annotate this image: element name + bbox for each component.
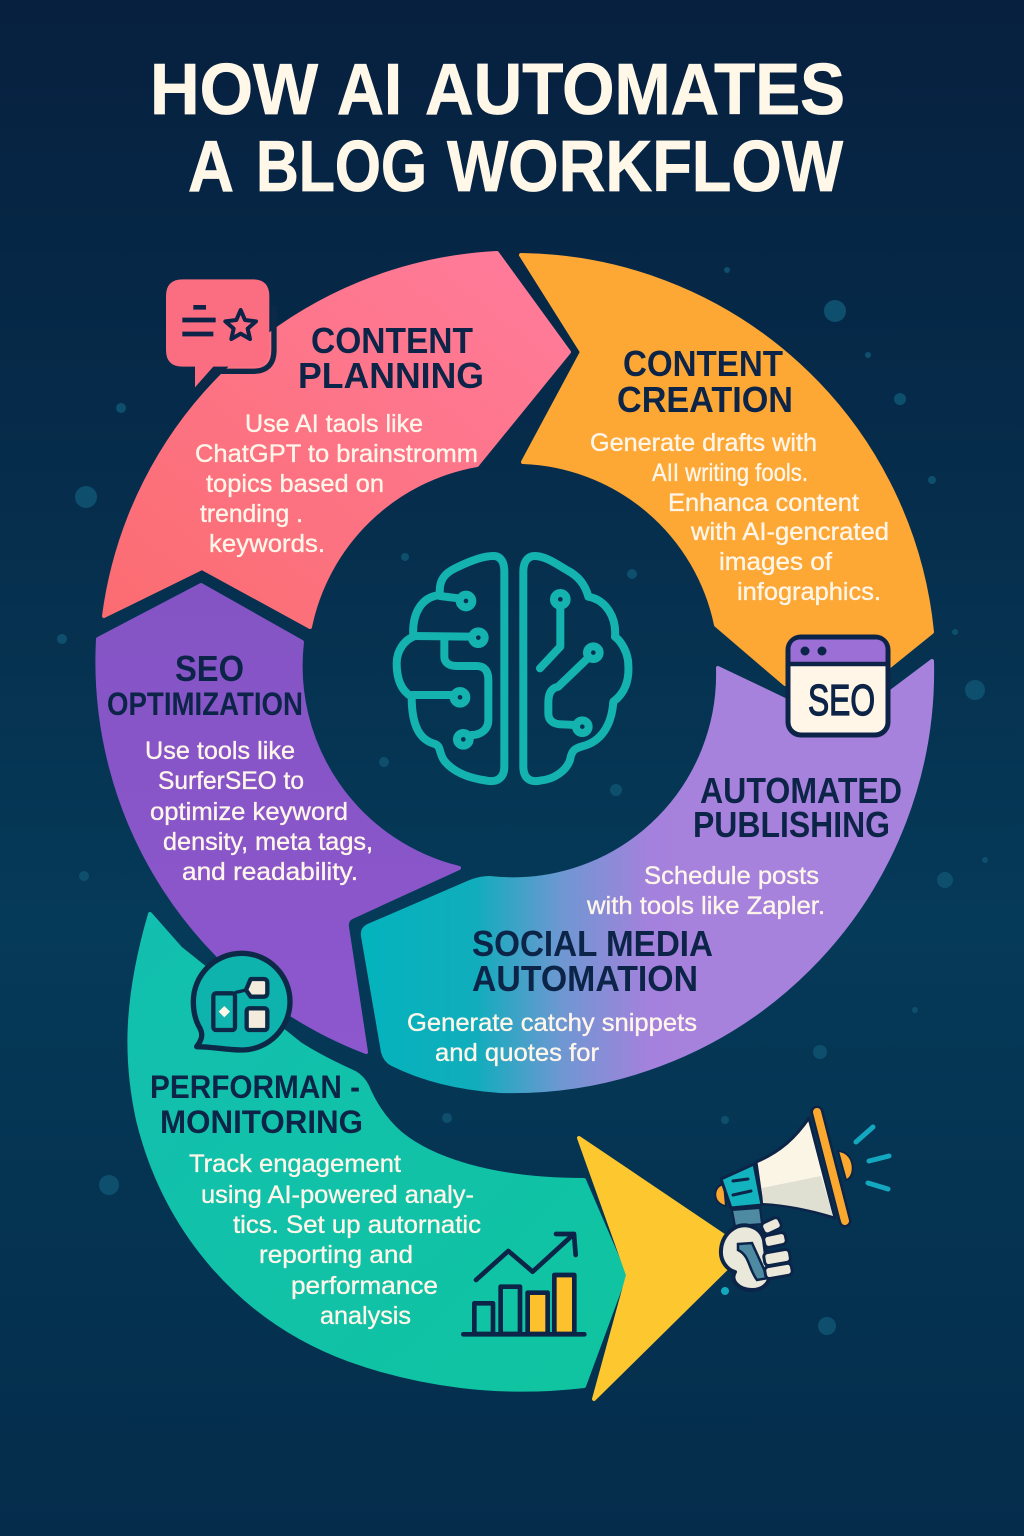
body text: automated publishing: Schedule posts	[644, 862, 819, 890]
body text: performance monitoring: using AI-powered analy-	[201, 1181, 474, 1209]
heading: automated publishing: PUBLISHING	[693, 804, 890, 845]
title: HOW	[150, 50, 318, 130]
body text: content creation: Generate drafts with	[590, 429, 817, 457]
panel: SEO optimization	[97, 585, 459, 1052]
body text: content planning: keywords.	[209, 530, 325, 558]
body text: content planning: trending .	[200, 500, 303, 528]
arrowhead: yellow	[579, 1138, 745, 1399]
megaphone rim	[817, 1112, 845, 1221]
title	[150, 50, 845, 207]
body text: SEO optimization	[145, 737, 373, 886]
body text: content creation: infographics.	[737, 578, 881, 606]
heading: automated publishing	[693, 770, 902, 845]
megaphone neck	[721, 1164, 762, 1208]
icon: brain with circuit traces	[397, 556, 628, 781]
heading: SEO optimization: SEO	[175, 648, 244, 689]
body text: content planning: ChatGPT to brainstromm	[195, 440, 478, 468]
heading: social media automation: SOCIAL MEDIA	[472, 923, 713, 964]
body text: SEO optimization: optimize keyword	[150, 798, 348, 826]
icon: SEO browser window	[788, 637, 888, 735]
body text: SEO optimization: Use tools like	[145, 737, 295, 765]
title: BLOG	[256, 127, 427, 207]
body text: social media automation: Generate catchy snippets	[407, 1009, 697, 1037]
segment shape: violet arrow	[97, 585, 459, 1052]
panel: automated publishing and social media automation	[363, 637, 932, 1091]
body text: performance monitoring: analysis	[320, 1302, 411, 1330]
megaphone cone	[756, 1118, 835, 1218]
segment shape: pink arrow	[104, 253, 569, 627]
body text: SEO optimization: and readability.	[182, 858, 358, 886]
panel: content creation	[521, 255, 932, 690]
panel: performance monitoring	[129, 914, 625, 1390]
body text: content creation	[590, 429, 889, 606]
body text: content creation: with AI-gencrated	[690, 518, 889, 546]
icon: SEO browser window: SEO	[808, 676, 875, 725]
heading: content planning: PLANNING	[298, 355, 484, 396]
heading: content creation: CONTENT	[623, 343, 783, 384]
body text: performance monitoring: Track engagement	[189, 1150, 401, 1178]
body text: SEO optimization: density, meta tags,	[163, 828, 373, 856]
body text: performance monitoring: tics. Set up autornatic	[233, 1211, 481, 1239]
megaphone handle	[732, 1208, 762, 1226]
panel: content planning	[104, 253, 569, 627]
megaphone rear bump	[715, 1184, 726, 1206]
heading: automated publishing: AUTOMATED	[700, 770, 902, 811]
segment shape: purple-to-teal arrow	[363, 661, 932, 1091]
body text: content planning: Use AI taols like	[245, 410, 423, 438]
heading: content creation	[617, 343, 793, 420]
heading: SEO optimization	[107, 648, 303, 722]
icon: dashboard chat bubble	[193, 953, 290, 1050]
heading: performance monitoring: PERFORMAN -	[150, 1069, 360, 1105]
body text: performance monitoring: performance	[291, 1272, 438, 1300]
title: AI	[337, 50, 402, 130]
title: WORKFLOW	[447, 127, 843, 207]
body text: content creation: Enhanca content	[668, 489, 859, 517]
title: A	[188, 127, 234, 207]
segment shape: orange arrow	[521, 255, 932, 690]
icon: megaphone held in a fist	[715, 1112, 889, 1295]
heading: performance monitoring	[150, 1069, 363, 1140]
heading: content planning	[298, 320, 484, 396]
heading: content planning: CONTENT	[311, 320, 473, 361]
body text: content creation: AII writing fools.	[652, 459, 808, 487]
body text: content creation: images of	[719, 548, 832, 576]
megaphone front bump	[838, 1151, 853, 1180]
body text: SEO optimization: SurferSEO to	[158, 767, 304, 795]
body text: social media automation: and quotes for	[435, 1039, 599, 1067]
background particles	[57, 267, 988, 1335]
fist	[721, 1225, 769, 1290]
body text: content planning: topics based on	[206, 470, 384, 498]
icon: chat bubble with star	[166, 279, 274, 390]
heading: social media automation: AUTOMATION	[472, 958, 698, 999]
heading: SEO optimization: OPTIMIZATION	[107, 686, 303, 722]
segment shape: teal arrow	[129, 914, 625, 1390]
heading: performance monitoring: MONITORING	[160, 1104, 363, 1140]
heading: content creation: CREATION	[617, 379, 793, 420]
body text: automated publishing: with tools like Zapler.	[586, 892, 825, 920]
body text: automated publishing	[586, 862, 825, 920]
sound lines	[856, 1127, 889, 1189]
heading: social media automation	[472, 923, 713, 999]
body text: content planning	[195, 410, 478, 558]
body text: performance monitoring: reporting and	[259, 1241, 413, 1269]
title: AUTOMATES	[425, 50, 845, 130]
body text: performance monitoring	[189, 1150, 481, 1330]
body text: social media automation	[407, 1009, 697, 1067]
icon: bar chart with rising arrow	[463, 1234, 584, 1334]
